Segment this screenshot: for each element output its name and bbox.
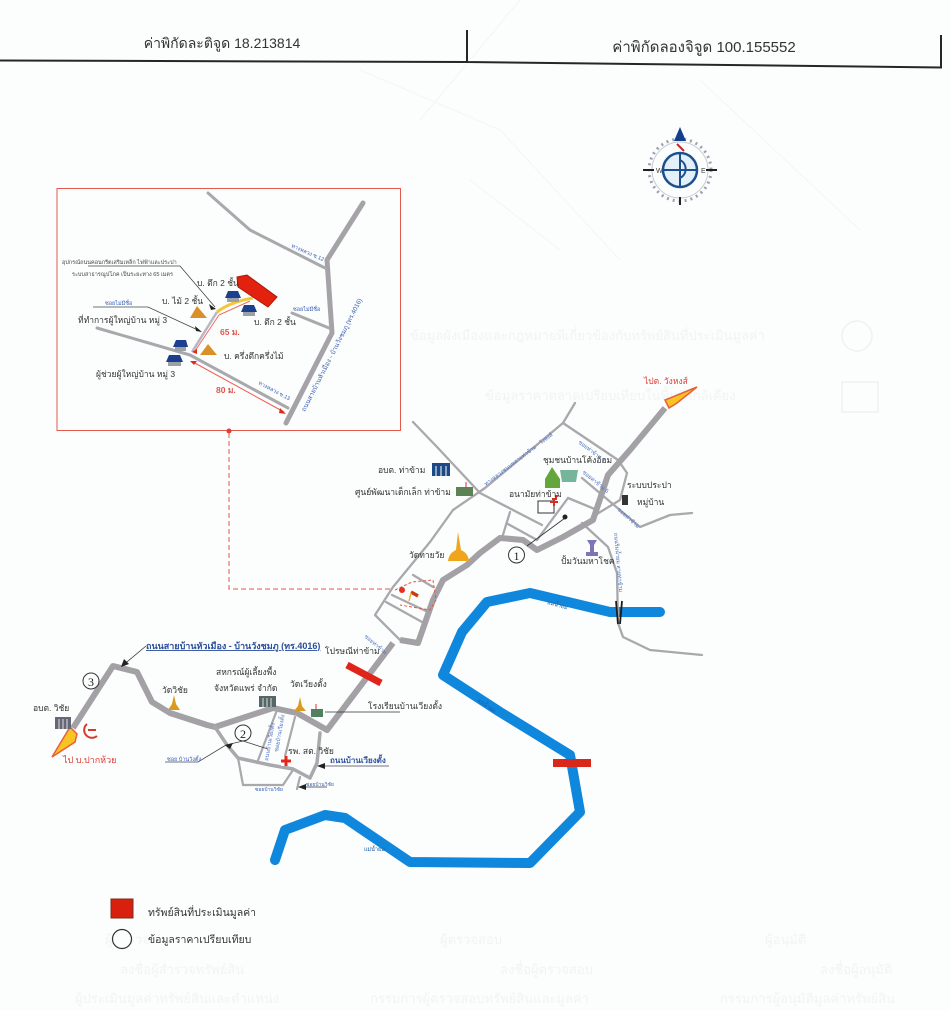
inset note: ระบบสาธารณูปโภค เป็นระยะทาง 65 เมตร <box>72 270 173 278</box>
place labels: หมู่บ้าน <box>637 497 664 508</box>
red marker north of river <box>347 665 381 683</box>
latitude label: ค่าพิกัดละติจูด 18.213814 <box>144 35 301 52</box>
icon: compass rose <box>643 127 717 205</box>
icon: compass rose: E <box>701 168 706 175</box>
faint show-through text: ลงชื่อผู้อนุมัติ <box>820 961 892 978</box>
arrow to Pak Huai <box>52 727 116 765</box>
inset road labels: ทางหลวง ซ.12 <box>290 242 325 263</box>
legend text: comparable data: ข้อมูลราคาเปรียบเทียบ <box>148 933 251 946</box>
faint show-through text: ข้อมูลราคาตลาดเปรียบเทียบในพื้นที่ใกล้เคียง <box>485 386 736 404</box>
panel: location inset map: 80 ม. <box>216 385 236 395</box>
place labels: อบต. วิชัย <box>33 703 69 713</box>
place labels: ชุมชนบ้านโค้งอ้อม <box>543 455 612 466</box>
icon: health station <box>538 495 558 513</box>
small road labels: ถนนริมน้ำยม สายท่าข้าม <box>612 532 625 593</box>
inset road labels: ทางหลวง ซ.13 <box>257 380 291 402</box>
icon: cooperative building <box>259 696 276 707</box>
inset road labels: ถนนสายบ้านหัวเมือง - บ้านวังชมภู (ทร.4016) <box>300 297 364 413</box>
callout: small lanes <box>300 786 327 788</box>
legend swatch: comparable data <box>112 930 132 948</box>
highlighted access lane <box>217 298 253 312</box>
inset labels: ที่ทำการผู้ใหญ่บ้าน หมู่ 3 <box>78 314 167 326</box>
numbered marker 2: 2 <box>240 727 246 741</box>
appraised property <box>237 275 277 307</box>
small road labels: ซอยท่าข้าม <box>363 633 389 656</box>
legend <box>111 899 256 948</box>
place labels: วัดทายวัย <box>409 550 444 560</box>
place labels: ศูนย์พัฒนาเด็กเล็ก ท่าข้าม <box>355 486 451 498</box>
icon: Wat Wiang Tang temple <box>294 697 306 711</box>
icon: Wiang Tang school <box>311 704 323 717</box>
faint show-through text: กรรมการผู้อนุมัติมูลค่าทรัพย์สิน <box>720 991 895 1007</box>
small road labels: แม่น้ำยม <box>364 845 385 853</box>
inset note: อุปกรณ์ถนนคอนกรีตเสริมเหล็ก ไฟฟ้าและประปา <box>62 258 177 266</box>
icon: water tower <box>622 495 628 505</box>
place labels: โรงเรียนบ้านเวียงตั้ง <box>368 700 442 711</box>
arrow to Wang Hong: ไปต. วังหงส์ <box>643 376 689 386</box>
legend swatch: appraised property <box>111 899 133 918</box>
place labels: อบต. ท่าข้าม <box>378 465 425 475</box>
faint show-through text: กรรมการผู้ตรวจสอบทรัพย์สินและมูลค่า <box>370 991 589 1007</box>
numbered marker 3 <box>83 673 99 689</box>
small road labels: ทางหลวงชนบทสายท่าข้าม - วังหงส์ <box>483 431 555 488</box>
inset lane to property <box>192 312 217 352</box>
place labels: ปั้มวันมหาโชค <box>561 555 615 566</box>
distance arrow 65 m <box>195 301 250 351</box>
icon: community <box>545 467 578 488</box>
small road labels: ซอยบ้านเวียงตั้ง <box>272 713 287 752</box>
panel: location inset map <box>57 188 400 430</box>
place labels: โปรษณีท่าข้าม <box>325 646 380 656</box>
callout: highway 4016 <box>122 646 146 666</box>
distance arrow 80 m <box>193 362 284 412</box>
callout: Wiang Tang road <box>318 765 389 767</box>
icon: fuel symbol <box>84 724 97 738</box>
inset labels: บ. ไม้ 2 ชั้น <box>162 295 203 306</box>
main road <box>73 408 665 730</box>
place labels: สหกรณ์ผู้เลี้ยงพื้ง <box>216 666 276 678</box>
faint show-through text: ข้อมูลผังเมืองและกฎหมายที่เกี่ยวข้องกับทรัพย์สินที่ประเมินมูลค่า <box>410 327 765 344</box>
small road labels: แม่น้ำยม <box>546 598 569 611</box>
faint show-through text: ผู้ประเมินมูลค่าทรัพย์สินและตำแหน่ง <box>75 991 279 1007</box>
small road labels: ซอยท่าข้าม <box>616 506 641 530</box>
small road labels: ซอยท่าข้าม 5 <box>581 469 610 495</box>
place labels: อนามัยท่าข้าม <box>509 489 562 499</box>
road callouts: ซอยบ้านวิชัย <box>306 781 334 788</box>
faint show-through text: ลงชื่อผู้ตรวจสอบ <box>500 961 593 978</box>
place labels <box>33 455 672 756</box>
longitude label: ค่าพิกัดลองจิจูด 100.155552 <box>612 39 796 56</box>
faint show-through text <box>75 321 895 1007</box>
header table: coordinates <box>0 30 941 68</box>
numbered marker 1: 1 <box>514 549 520 563</box>
small road labels <box>262 431 641 853</box>
road callouts: ซอยบ้านวิชัย <box>255 786 283 793</box>
faint show-through text: ลงชื่อผู้สำรวจทรัพย์สิน <box>120 961 244 978</box>
inset labels: ผู้ช่วยผู้ใหญ่บ้าน หมู่ 3 <box>96 369 175 380</box>
inset main road <box>286 203 363 423</box>
faint show-through text: ผู้ตรวจสอบ <box>440 932 502 948</box>
dashed leader from inset to site <box>226 428 392 589</box>
inset labels: บ. ตึก 2 ชั้น <box>254 316 296 327</box>
road callouts: ถนนบ้านเวียงตั้ง <box>330 754 386 765</box>
place labels: ระบบประปา <box>627 480 672 490</box>
arrow to Wang Hong <box>643 376 697 408</box>
inset road labels <box>105 242 364 413</box>
icon: Wat Thai Chai stupa <box>448 532 469 561</box>
inset labels: บ. ครึ่งตึกครึ่งไม้ <box>224 350 283 361</box>
icon: Tha Kham subdistrict office <box>432 463 450 476</box>
small road labels: แม่น้ำยม <box>476 696 498 715</box>
small road labels: ซอยท่าข้าม 4 <box>577 439 607 464</box>
icon: compass rose: W <box>656 168 663 175</box>
callout: school arrow <box>325 711 400 713</box>
place labels: รพ. สต. วิชัย <box>288 746 334 756</box>
river <box>275 593 660 863</box>
red marker on river <box>553 759 591 767</box>
faint show-through text: ผู้อนุมัติ <box>765 932 806 948</box>
inset labels: บ. ตึก 2 ชั้น <box>197 277 239 288</box>
minor roads north <box>375 403 702 655</box>
distance labels: 65 ม. <box>220 327 240 337</box>
building icons <box>166 291 257 366</box>
numbered marker 2 <box>165 725 268 762</box>
place labels: วัดเวียงตั้ง <box>290 678 327 689</box>
inset road labels: ซอยไม่มีชื่อ <box>293 305 320 313</box>
numbered marker 1 <box>508 514 568 563</box>
place labels: วัดวิชัย <box>162 685 188 695</box>
icon: hospital cross <box>281 756 291 766</box>
site detail near property <box>395 580 436 610</box>
inset pointer lines <box>88 266 215 331</box>
faint show-through text: ผู้สำรวจ <box>105 932 150 948</box>
icon: fuel station <box>586 540 598 556</box>
numbered marker 3: 3 <box>88 675 94 689</box>
icon: child development centre <box>456 482 473 496</box>
road callouts: ซอย บ้านวังตั้ง <box>167 755 201 763</box>
road callouts: ถนนสายบ้านหัวเมือง - บ้านวังชมภู (ทร.4016) <box>146 640 320 652</box>
bridge <box>616 601 622 624</box>
icon: Wichai subdistrict office <box>55 717 71 729</box>
roads south loop <box>215 710 320 789</box>
inset side roads <box>97 193 329 408</box>
inset note <box>62 258 177 278</box>
icon: Wat Wichai temple <box>168 695 180 710</box>
legend text: appraised property: ทรัพย์สินที่ประเมินมูลค่า <box>148 905 256 919</box>
landmark icons <box>55 463 628 766</box>
arrow to Pak Huai: ไป บ.ปากห้วย <box>62 755 116 765</box>
inset road labels: ซอยไม่มีชื่อ <box>105 299 132 307</box>
place labels: จังหวัดแพร่ จำกัด <box>214 683 277 693</box>
small road labels: ถนนบ้านเวียงตั้ง <box>262 722 277 761</box>
inset labels <box>78 277 296 380</box>
road callouts <box>121 640 400 793</box>
